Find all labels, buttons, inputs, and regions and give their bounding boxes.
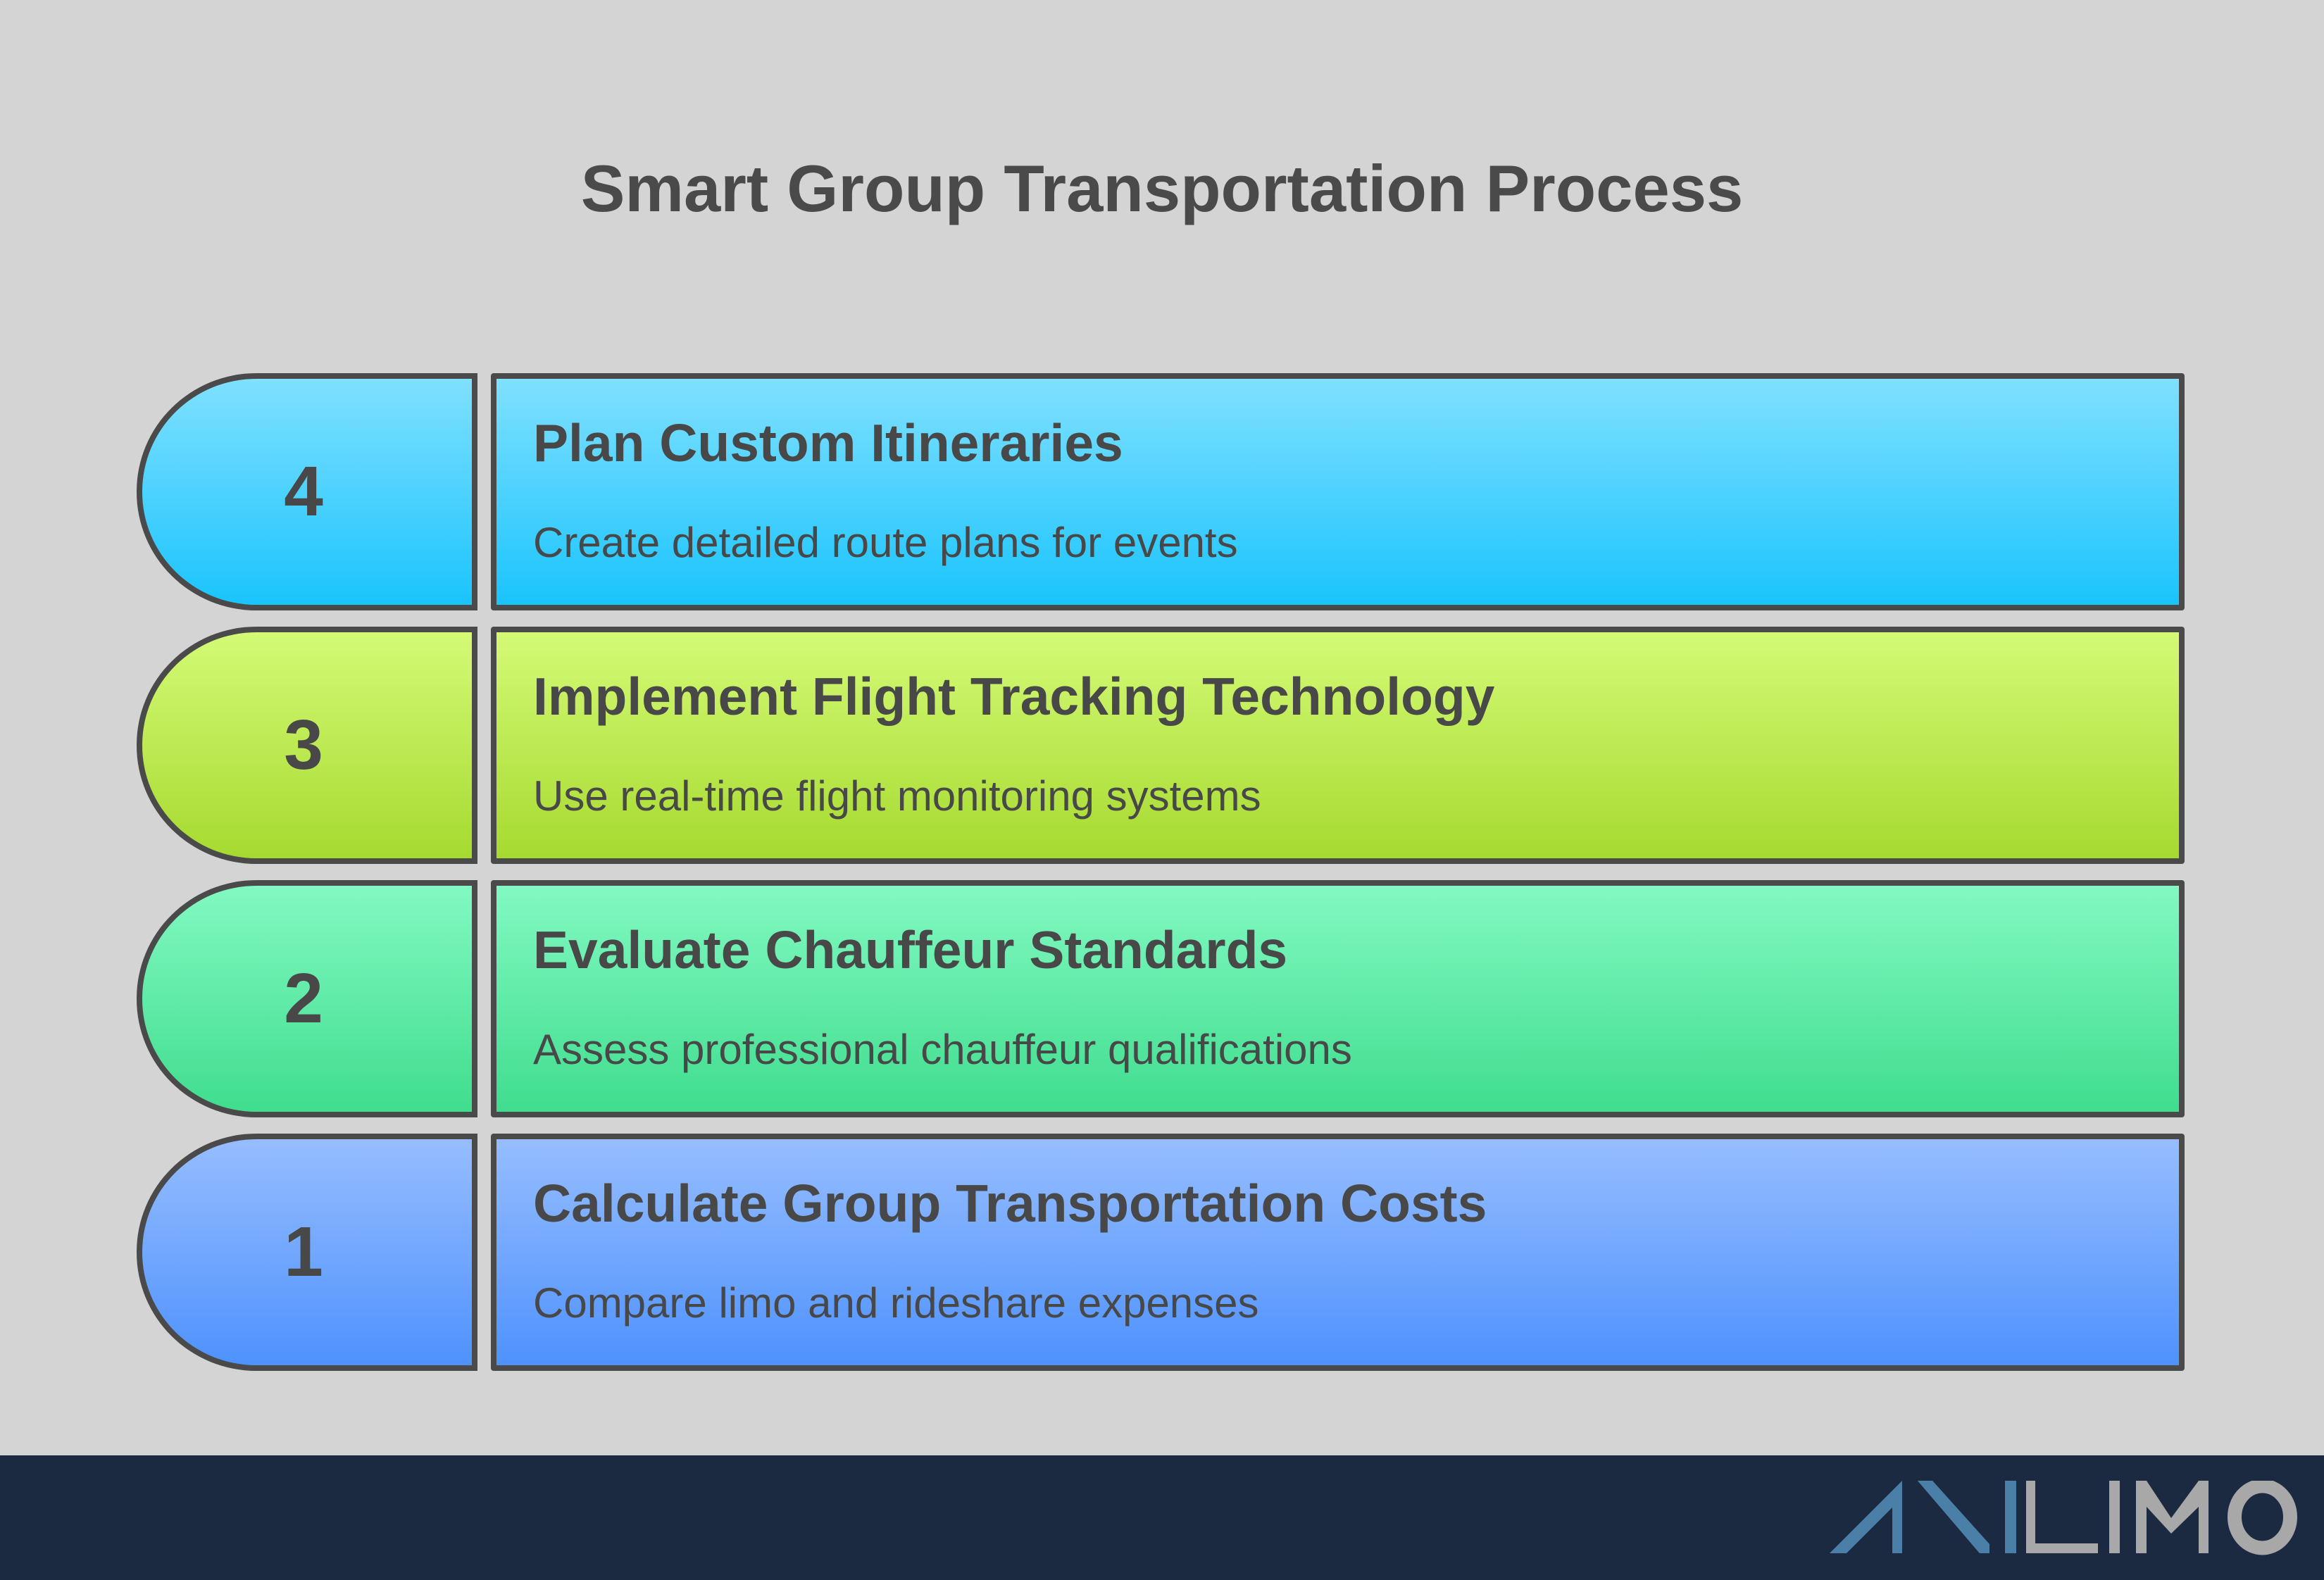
- step 4 text: Create detailed route plans for events: [533, 519, 1238, 566]
- number tab 2: [137, 880, 477, 1117]
- step 3 text: Implement Flight Tracking Technology: [533, 667, 1494, 726]
- step 2 text: Assess professional chauffeur qualifications: [533, 1026, 1352, 1073]
- step 1 text: Calculate Group Transportation Costs: [533, 1174, 1487, 1233]
- step 4 text: Plan Custom Itineraries: [533, 413, 1123, 472]
- step 3 text: Use real-time flight monitoring systems: [533, 772, 1261, 820]
- step 4: [137, 373, 2185, 610]
- number tab 4: [137, 373, 477, 610]
- number tab 4: 4: [284, 452, 323, 531]
- step 2: [137, 880, 2185, 1117]
- step 1: [137, 1134, 2185, 1371]
- step 2 text: Evaluate Chauffeur Standards: [533, 920, 1287, 979]
- step 2 text: [491, 880, 2185, 1117]
- number tab 3: 3: [284, 706, 323, 784]
- step 4 text: [491, 373, 2185, 610]
- logo: [1830, 1481, 2297, 1555]
- number tab 1: 1: [284, 1212, 323, 1291]
- number tab 3: [137, 627, 477, 864]
- number tab 2: 2: [284, 959, 323, 1038]
- title: Smart Group Transportation Process: [581, 151, 1743, 225]
- step 1 text: [491, 1134, 2185, 1371]
- footer bar: [0, 1455, 2324, 1580]
- step 3 text: [491, 627, 2185, 864]
- step 1 text: Compare limo and rideshare expenses: [533, 1279, 1259, 1327]
- step 3: [137, 627, 2185, 864]
- number tab 1: [137, 1134, 477, 1371]
